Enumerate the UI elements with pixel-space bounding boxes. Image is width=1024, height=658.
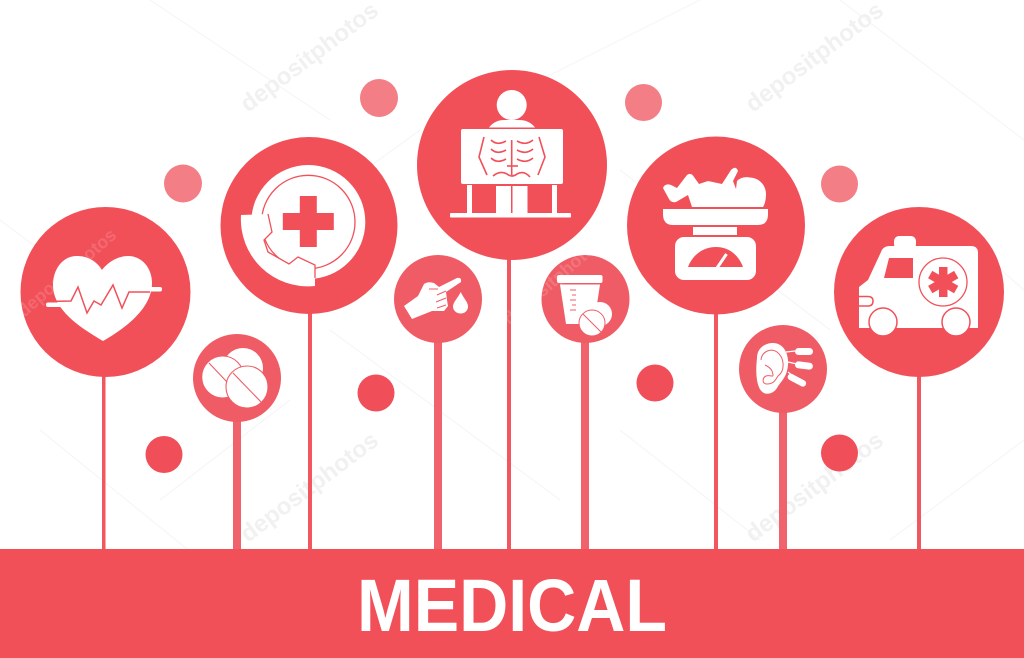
title: MEDICAL [357,564,667,647]
icon: ear and probes [756,343,813,394]
icon: phone with medical cross [241,165,365,286]
panel: infant scale [627,136,805,552]
watermark text on white [235,0,889,548]
panel: x-ray [417,70,607,552]
panel: ear exam [739,325,827,552]
watermark text on circles: depositphotos [14,225,120,321]
panel: lab sample [542,255,630,552]
icon: heart with pulse [46,256,162,341]
watermark text on white: depositphotos [740,427,889,548]
icon: chest x-ray [450,90,571,218]
panel: blood test [394,255,482,552]
icon: baby on weighing scale [663,168,768,280]
panel: pills [193,334,281,552]
watermark text on white: depositphotos [235,0,384,118]
panel: emergency call [220,137,398,552]
watermark text on white: depositphotos [235,427,384,548]
icon: tablets [202,348,268,408]
watermark text on circles: depositphotos [500,233,606,329]
footer band [0,549,1024,658]
decorative dots [146,79,858,473]
watermark text on white: depositphotos [740,0,889,118]
icon: finger and blood drop [404,278,468,319]
panel: ambulance [834,207,1004,552]
watermark text on circles [14,225,606,329]
icon: ambulance [859,236,978,336]
icon: measuring cup and tablets [557,275,612,336]
panel: heart rate [20,207,190,552]
